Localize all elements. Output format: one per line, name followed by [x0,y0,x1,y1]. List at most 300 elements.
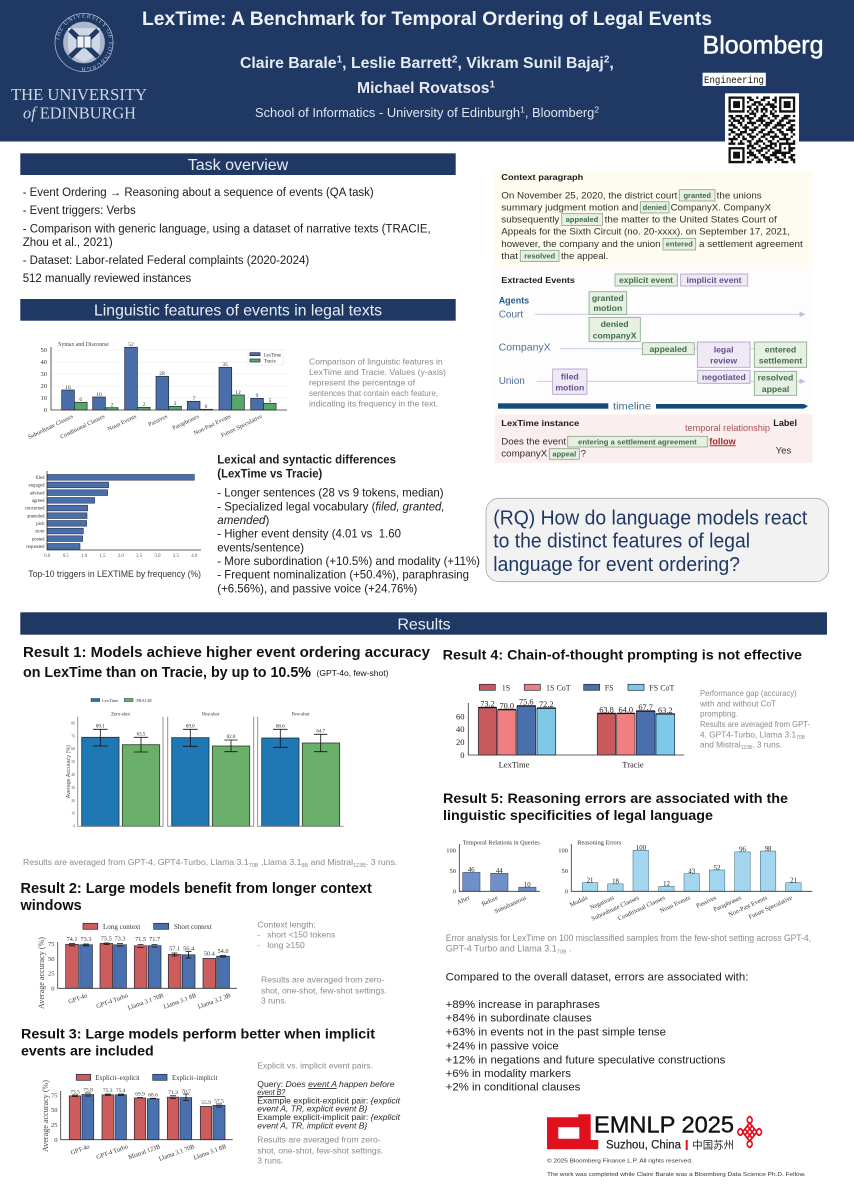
bar chart: Result 2 context length [36,922,237,1012]
bar chart: reasoning errors: 18 [612,878,620,886]
bar chart: reasoning errors: Future Speculative [748,894,794,921]
note: context length: Context length: [257,919,316,929]
text block: task overview: - Event triggers: Verbs [23,205,136,217]
bar chart: top-10 triggers: amended [27,514,45,519]
bar chart: reasoning errors: 52 [714,865,721,872]
bar chart: reasoning errors: Negations [589,894,616,912]
bar chart: Result 1 accuracy by shot setting: 68.6 [276,724,285,730]
callout: research question: language for event ordering? [493,554,740,576]
panel: context paragraph: Appeals for the Sixth Circuit (no. 20-xxxx). on September 17, 2021, [501,227,790,238]
authors line 1: , [609,55,614,72]
bar chart: top-10 triggers: 4.0 [191,554,198,559]
bar chart: temporal relations in queries: Simultaneous [494,894,528,915]
bar chart: Result 3 explicit vs implicit: 50 [51,1107,58,1114]
bar chart: Result 3 explicit vs implicit: 69.9 [135,1092,145,1098]
panel: context paragraph: summary judgment motion and [501,203,638,214]
bar chart: syntax and discourse: 7 [193,396,196,402]
University of Edinburgh wordmark [11,85,147,122]
trigger highlights: denied [643,203,667,212]
text block: lexical and syntactic differences: amended) [217,514,269,527]
text block: error associations: +24% in passive voice [446,1040,559,1052]
bar chart: Result 1 accuracy by shot setting: One-shot [202,712,220,718]
bar chart: top-10 triggers: engaged [29,484,45,489]
event boxes: settlement [759,355,802,365]
caption: linguistic features chart: Comparison of linguistic features in [309,357,443,367]
bar chart: Result 1 accuracy by shot setting: 64.7 [316,730,326,734]
University of Edinburgh wordmark: of EDINBURGH [23,103,136,122]
bar chart: top-10 triggers: pick [36,522,45,527]
event boxes: filed [561,371,579,381]
bar chart: Result 4 chain-of-thought: 73.2 [480,700,495,708]
bar chart: syntax and discourse: 30 [40,371,47,378]
bar chart: syntax and discourse: 52 [128,342,134,348]
bar chart: temporal relations in queries: 50 [450,868,456,875]
bar chart: top-10 triggers: 1.5 [99,554,106,559]
heading: Result 2: windows [20,898,82,914]
Bloomberg Engineering logo: Engineering [704,75,764,86]
bar chart: syntax and discourse: 6 [79,397,82,403]
bar chart: Result 3 explicit vs implicit: GPT-4 Turbo [95,1143,129,1161]
bar chart: Result 1 accuracy by shot setting: 60 [71,747,75,751]
footer notes [547,1158,806,1178]
bar chart: Result 2 context length: GPT-4o [67,992,88,1006]
bar chart: syntax and discourse: Tracie [264,360,276,364]
panel: LexTime instance: ? [581,449,586,460]
legend: event types [615,274,748,286]
bar chart: reasoning errors: 21 [790,878,797,884]
note: explicit vs implicit pairs [257,1060,401,1130]
caption: Result 3: 3 runs. [257,1156,283,1166]
text block: lexical and syntactic differences: events/sentence) [217,542,304,555]
logo: EMNLP 2025: EMNLP 2025 [594,1112,734,1138]
authors line 1: 2 [452,54,458,66]
caption: Result 2: shot, one-shot, few-shot settings. [261,985,387,995]
bar chart: reasoning errors: Passives [695,894,718,910]
bar chart: top-10 triggers: agreed [32,499,45,504]
bar chart: Result 1 accuracy by shot setting: 40 [71,773,75,777]
bar chart: reasoning errors: 21 [587,878,593,884]
bar chart: syntax and discourse: 9 [256,393,259,399]
bar chart: syntax and discourse: 20 [40,383,47,390]
bar chart: Result 1 accuracy by shot setting: 70 [71,734,75,738]
bar chart: temporal relations in queries: 44 [496,868,503,875]
bar chart: Result 1 accuracy by shot setting: Few-shot [292,712,310,718]
note: explicit vs implicit pairs: event A, TR, implicit event B} [257,1120,367,1130]
panel: LexTime instance: companyX [501,449,548,460]
authors line 1: 1 [337,54,343,66]
heading: Result 3: Result 3: Large models perform better when implicit [21,1027,375,1043]
panel: LexTime instance: Yes [776,445,792,456]
bar chart: Result 3 explicit vs implicit: 71.3 [168,1090,178,1096]
bar chart: syntax and discourse: Paraphrases [172,414,201,432]
note: explicit vs implicit pairs: Query: Does event A happen before [257,1079,395,1089]
bar chart: temporal relations in queries [446,840,540,915]
trigger highlights [520,190,715,262]
event boxes: entered [765,345,796,355]
bar chart: syntax and discourse: Syntax and Discourse [58,342,109,348]
panel: LexTime instance: entering a settlement agreement [578,438,697,446]
bar chart: Result 4 chain-of-thought: 75.6 [519,698,534,706]
bar chart: Result 3 explicit vs implicit: 57.5 [214,1098,224,1104]
panel: context paragraph: a settlement agreement [699,239,803,250]
event boxes: appealed [649,344,687,354]
affiliations: 1 [520,104,525,114]
bar chart: Result 1 accuracy by shot setting: 30 [71,786,75,790]
bar chart: Result 4 chain-of-thought: 63.2 [658,706,673,715]
bar chart: syntax and discourse: Passives [148,414,169,428]
bar chart: syntax and discourse: 0 [205,404,208,410]
caption: Result 5: 70B [557,949,567,955]
affiliations: , Bloomberg [525,105,594,120]
section heading: Linguistic features: Linguistic features of events in legal texts [94,303,382,320]
bar chart: reasoning errors: 96 [739,846,746,854]
text block: error associations: +89% increase in paraphrases [446,999,601,1011]
bar chart: Result 2 context length: 57.1 [169,946,180,953]
bar chart: Result 3 explicit vs implicit: 55.9 [201,1100,211,1106]
event boxes: resolved [758,373,793,383]
bar chart: syntax and discourse: Noun Events [107,414,138,433]
heading: Result 5 [443,790,788,823]
authors line 1: Claire Barale [240,55,337,72]
bar chart: Result 4 chain-of-thought [456,683,684,770]
bar chart: top-10 triggers: 3.5 [173,554,179,559]
panel: LexTime instance: Does the event [501,436,566,447]
bar chart: reasoning errors: 0 [565,888,568,896]
event boxes: motion [593,303,622,313]
agent labels: Agents [499,295,529,305]
bar chart: Result 4 chain-of-thought: LexTime [499,760,530,770]
event boxes: companyX [593,330,637,340]
legend: event types: explicit event [619,275,673,285]
arrow: timeline: timeline [613,400,651,412]
bar chart: Result 1 accuracy by shot setting: 63.5 [137,732,146,738]
bar chart: Result 3 explicit vs implicit: 0 [54,1137,58,1144]
bar chart: top-10 triggers: 2.5 [136,554,143,559]
text block: error associations: +12% in negations and future speculative constructions [446,1054,726,1066]
caption: Result 4: . 3 runs. [752,740,782,750]
event boxes: denied [601,319,629,329]
bar chart: Result 2 context length: 74.1 [66,936,78,943]
bar chart: Result 4 chain-of-thought: 67.7 [638,703,653,712]
bar chart: top-10 triggers: 0.5 [63,554,69,559]
note: explicit vs implicit pairs: Explicit vs. implicit event pairs. [257,1060,373,1070]
bar chart: temporal relations in queries: 100 [446,848,456,854]
bar chart: Result 1 accuracy by shot setting: 62.6 [227,735,236,740]
caption: Result 5: . [567,943,572,953]
bar chart: Result 1 accuracy by shot setting [66,698,344,828]
bar chart: top-10 triggers: advised [30,491,45,496]
bar chart: Result 1 accuracy by shot setting: 50 [71,760,75,764]
bar chart: Result 2 context length: 71.7 [149,936,160,943]
bar chart: Result 3 explicit vs implicit: 25 [51,1122,58,1129]
bar chart: syntax and discourse: Subordinate Clauses [28,414,75,441]
bar chart: Result 2 context length: 56.4 [183,946,195,953]
bar chart: Result 1 accuracy by shot setting: 69.1 [96,724,105,730]
caption: Result 1: ,Llama 3.1 [258,857,302,867]
bar chart: Result 4 chain-of-thought: 64.0 [619,706,633,714]
heading: Result 1: on LexTime than on Tracie, by up to 10.5% [23,665,311,681]
panel: context paragraph: CompanyX. CompanyX [671,203,772,214]
caption: Result 1: Results are averaged from GPT-4, GPT4-Turbo, Llama 3.1 [23,857,249,867]
note: explicit vs implicit pairs: Example explicit-explicit pair: {explicit [257,1096,401,1106]
bar chart: syntax and discourse: 2 [143,402,146,408]
trigger highlights: appealed [566,215,599,224]
bar chart: syntax and discourse: 3 [174,401,177,407]
bar chart: Result 4 chain-of-thought: 70.0 [500,702,514,710]
panel: context paragraph: the matter to the United States Court of [605,215,777,226]
heading: Result 1 [23,645,430,681]
caption: Result 4: prompting. [700,709,738,719]
bar chart: Result 3 explicit vs implicit: 70.7 [181,1089,191,1095]
caption: linguistic features chart [309,357,446,408]
text block: task overview: - Event Ordering → Reasoning about a sequence of events (QA task) [23,187,374,199]
bar chart: Result 1 accuracy by shot setting: TRACIE [136,698,152,703]
callout: research question: (RQ) How do language models react [493,507,808,529]
caption: Result 3: Results are averaged from zero- [257,1135,381,1145]
bar chart: Result 4 chain-of-thought: 63.8 [599,706,614,714]
bar chart: syntax and discourse: 10 [40,395,47,402]
text block: lexical and syntactic differences: Lexical and syntactic differences [217,452,396,466]
bar chart: reasoning errors: 100 [636,845,647,852]
bar chart: reasoning errors: 100 [558,848,568,854]
bar chart: syntax and discourse: Non-Past Events [193,414,232,437]
panel: context paragraph: subsequently [501,215,560,226]
trigger highlights: entered [666,240,693,249]
section heading: Task overview [20,153,456,175]
bar chart: temporal relations in queries: 46 [468,867,475,874]
affiliations: 2 [594,104,599,114]
caption: Result 1: . 3 runs. [366,857,397,867]
Bloomberg Engineering logo [702,32,824,86]
bar chart: Result 4 chain-of-thought: 60 [456,711,464,721]
heading: Result 4: Result 4: Chain-of-thought prompting is not effective [443,646,802,662]
footer notes: © 2025 Bloomberg Finance L.P. All rights reserved. [547,1158,693,1165]
bar chart: Result 2 context length: 75 [48,941,54,948]
bar chart: reasoning errors: Conditional Clauses [617,894,667,922]
bar chart: syntax and discourse [28,342,287,441]
text block: error associations: +6% in modality markers [446,1068,572,1080]
bar chart: top-10 triggers: 2.0 [118,554,124,559]
panel: LexTime instance: follow [709,436,736,446]
text block: lexical and syntactic differences: (+6.56%), and passive voice (+24.76%) [217,582,417,595]
caption: Result 5: GPT-4 Turbo and Llama 3.1 [446,943,557,953]
note: context length: - short <150 tokens [257,930,336,940]
caption: Result 3: shot, one-shot, few-shot settings. [257,1145,383,1155]
bar chart: temporal relations in queries: 10 [524,882,531,889]
bar chart: Result 3 explicit vs implicit: Explicit–implicit [172,1073,218,1082]
bar chart: Result 3 explicit vs implicit: Explicit–explicit [95,1073,140,1082]
panel: context paragraph: Context paragraph [501,172,583,182]
bar chart: Result 2 context length: Llama 3.1 8B [163,992,197,1011]
caption: Result 4 [699,688,810,751]
bar chart: Result 2 context length: GPT-4 Turbo [95,992,129,1010]
text block: lexical and syntactic differences: - Longer sentences (28 vs 9 tokens, median) [217,487,444,500]
callout: research question [486,498,829,582]
note: explicit vs implicit pairs: event B? [257,1087,285,1097]
text block: lexical and syntactic differences: (LexTime vs Tracie) [217,466,322,480]
bar chart: syntax and discourse: 16 [65,385,71,391]
caption: Result 4: with and without CoT [699,698,776,708]
text block: error associations: +2% in conditional clauses [446,1082,581,1094]
bar chart: reasoning errors: Paraphrases [712,894,743,914]
authors line 2: Michael Rovatsos [357,80,490,97]
bar chart: Result 3 explicit vs implicit: Llama 3.1 8B [193,1143,227,1162]
caption: linguistic features chart: represent the percentage of [309,377,416,387]
bar chart: top-10 triggers: filed [36,476,45,481]
bar chart: Result 4 chain-of-thought: 0 [460,750,464,760]
event boxes: negotiated [702,372,746,382]
text block: task overview: Zhou et al., 2021) [23,237,113,249]
bar chart: Result 1 accuracy by shot setting: 10 [71,812,75,816]
bar chart: syntax and discourse: Future Speculative [220,414,264,439]
caption: Result 1: 123B [353,863,366,869]
authors line 1: 2 [604,54,610,66]
bar chart: Result 2 context length: Short context [174,922,212,931]
bar chart: top-10 triggers [25,471,201,559]
bar chart: syntax and discourse: 12 [235,390,241,396]
bar chart: Result 2 context length: 73.3 [114,936,126,942]
bar chart: Result 3 explicit vs implicit: 73.5 [70,1090,80,1096]
bar chart: temporal relations in queries: After [456,894,472,906]
caption: linguistic features chart: LexTime and Tracie. Values (y-axis) [309,367,446,377]
heading: Result 5: Result 5: Reasoning errors are associated with the [443,790,788,806]
bar chart: top-10 triggers: 1.0 [81,554,88,559]
bar chart: Result 1 accuracy by shot setting: 69.0 [186,724,195,730]
panel: LexTime instance: temporal relationship [685,423,770,433]
bar chart: Result 1 accuracy by shot setting: Average Accuracy (%) [66,745,72,798]
text block: error associations: Compared to the overall dataset, errors are associated with: [446,972,748,984]
bar chart: Result 1 accuracy by shot setting: 80 [71,722,75,726]
bar chart: syntax and discourse: 35 [222,362,228,368]
caption: Result 5: Error analysis for LexTime on 100 misclassified samples from the few-shot setting across GPT-4, [446,933,811,943]
icon: University of Edinburgh crest: THE UNIVERSITY OF EDINBURGH [56,14,113,72]
heading: Result 1: (GPT-4o, few-shot) [316,668,389,678]
bar chart: top-10 triggers: 3.0 [154,554,161,559]
bar chart: Result 1 accuracy by shot setting: 0 [73,824,75,828]
caption: Result 4: 4, GPT4-Turbo, Llama 3.1 [700,729,796,739]
bar chart: Result 2 context length: 50.4 [204,950,216,957]
bar chart: Result 2 context length: 25 [48,970,54,978]
bar chart: reasoning errors: Non-Past Events [727,894,769,919]
caption: Result 2 [261,975,387,1006]
panel: context paragraph: On November 25, 2020, the district court [501,190,678,201]
event boxes [553,292,807,395]
panel: extracted events timeline [494,268,812,414]
bar chart: syntax and discourse: 5 [269,398,272,404]
heading: Result 2 [20,881,372,914]
panel: context paragraph: the appeal. [561,251,608,262]
caption: Result 1: 8B [301,863,308,869]
heading: Result 3: events are included [21,1043,154,1059]
note: context length: - long ≥150 [257,940,305,950]
agent labels [499,295,551,387]
text block: task overview: - Comparison with generic language, using a dataset of narrative texts (TRACIE, [23,223,431,235]
bar chart: syntax and discourse: LexTime [264,354,281,358]
note: explicit vs implicit pairs: Example explicit-implicit pair: {explicit [257,1112,401,1122]
poster title: LexTime: A Benchmark for Temporal Ordering of Legal Events [142,9,712,30]
affiliations: School of Informatics - University of Edinburgh [255,105,520,120]
bar chart: Result 2 context length: 71.5 [135,936,146,943]
callout: research question: to the distinct features of legal [493,531,750,553]
text block: task overview [23,187,431,285]
bar chart: reasoning errors: Modals [569,894,589,909]
authors line 2: 1 [490,79,496,90]
bar chart: Result 3 explicit vs implicit: 68.6 [148,1092,158,1098]
bar chart: Result 2 context length: Average accuracy (%) [36,937,46,1009]
text block: task overview: - Dataset: Labor-related Federal complaints (2020-2024) [23,255,309,267]
bar chart: syntax and discourse: 40 [40,359,47,366]
caption: Result 4: and Mistral [700,740,741,750]
text block: error associations [446,972,748,1094]
bar chart: Result 4 chain-of-thought: 40 [456,724,464,734]
trigger highlights: granted [683,191,711,200]
bar chart: reasoning errors: Noun Events [659,894,692,915]
trigger highlights: resolved [524,252,556,261]
agent labels: Union [499,376,525,387]
panel: LexTime instance: Label [773,418,797,428]
text block: error associations: +84% in subordinate clauses [446,1013,592,1025]
bar chart: Result 3 explicit vs implicit: Average accuracy (%) [40,1080,50,1152]
logo: EMNLP 2025: Suzhou, China [606,1140,682,1152]
panel: context paragraph: the unions [717,190,762,201]
bar chart: Result 4 chain-of-thought: 20 [456,737,464,747]
bar chart: Result 2 context length: Llama 3.1 70B [127,992,165,1012]
bar chart: syntax and discourse: 10 [96,392,102,398]
caption: Result 2: 3 runs. [261,996,287,1006]
bar chart: Result 2 context length: 75.5 [101,936,112,942]
arrows: agent lines [535,314,801,381]
caption: Result 1: and Mistral [308,857,353,867]
bar chart: reasoning errors: 98 [765,846,772,853]
heading: Result 2: Result 2: Large models benefit from longer context [20,881,372,897]
bar chart: Result 4 chain-of-thought: FS [605,683,614,692]
bar chart: Result 4 chain-of-thought: FS CoT [649,683,675,692]
text block: lexical and syntactic differences: - More subordination (+10.5%) and modality (+11%) [217,555,480,568]
text block: lexical and syntactic differences [217,452,480,595]
bar chart: syntax and discourse: Conditional Clauses [60,414,106,441]
caption: Result 1: 70B [249,863,259,869]
bar chart: syntax and discourse: 50 [40,347,47,354]
caption: Result 4: Results are averaged from GPT- [700,719,810,729]
heading: Result 5: linguistic specificities of legal language [443,807,713,823]
bar chart: Result 3 explicit vs implicit: Mistral 123B [128,1143,161,1161]
bar chart: top-10 triggers: store [35,530,44,535]
Bloomberg Engineering logo: Bloomberg [702,32,824,60]
bar chart: Result 4 chain-of-thought: 1S CoT [546,683,571,692]
bar chart: top-10 triggers: requested [26,545,45,550]
text block: lexical and syntactic differences: - Frequent nominalization (+50.4%), paraphrasing [217,569,469,582]
event boxes: appeal [762,384,789,394]
panel: LexTime instance [495,414,813,463]
bar chart: Result 2 context length: 0 [51,986,54,992]
bar chart: syntax and discourse: 2 [111,402,114,408]
heading: Result 1: Result 1: Models achieve higher event ordering accuracy [23,645,430,661]
bar chart: syntax and discourse: 0 [44,407,47,414]
text block: lexical and syntactic differences: - Specialized legal vocabulary (filed, granted, [217,500,445,513]
panel: context paragraph: that [501,251,518,262]
bar chart: temporal relations in queries: Before [481,894,499,908]
bar chart: Result 1 accuracy by shot setting: Zero-shot [111,712,130,718]
note: context length [257,919,336,950]
caption: linguistic features chart: indicating its frequency in the text. [309,398,438,408]
header banner [0,0,854,142]
agent labels: CompanyX [499,343,551,354]
bar chart: Result 3 explicit vs implicit: Llama 3.1 70B [158,1143,196,1163]
event boxes: review [710,355,737,365]
bar chart: top-10 triggers: 0.0 [44,554,51,559]
panel: LexTime instance: LexTime instance [501,418,580,428]
bar chart: Result 2 context length: 50 [48,956,54,963]
